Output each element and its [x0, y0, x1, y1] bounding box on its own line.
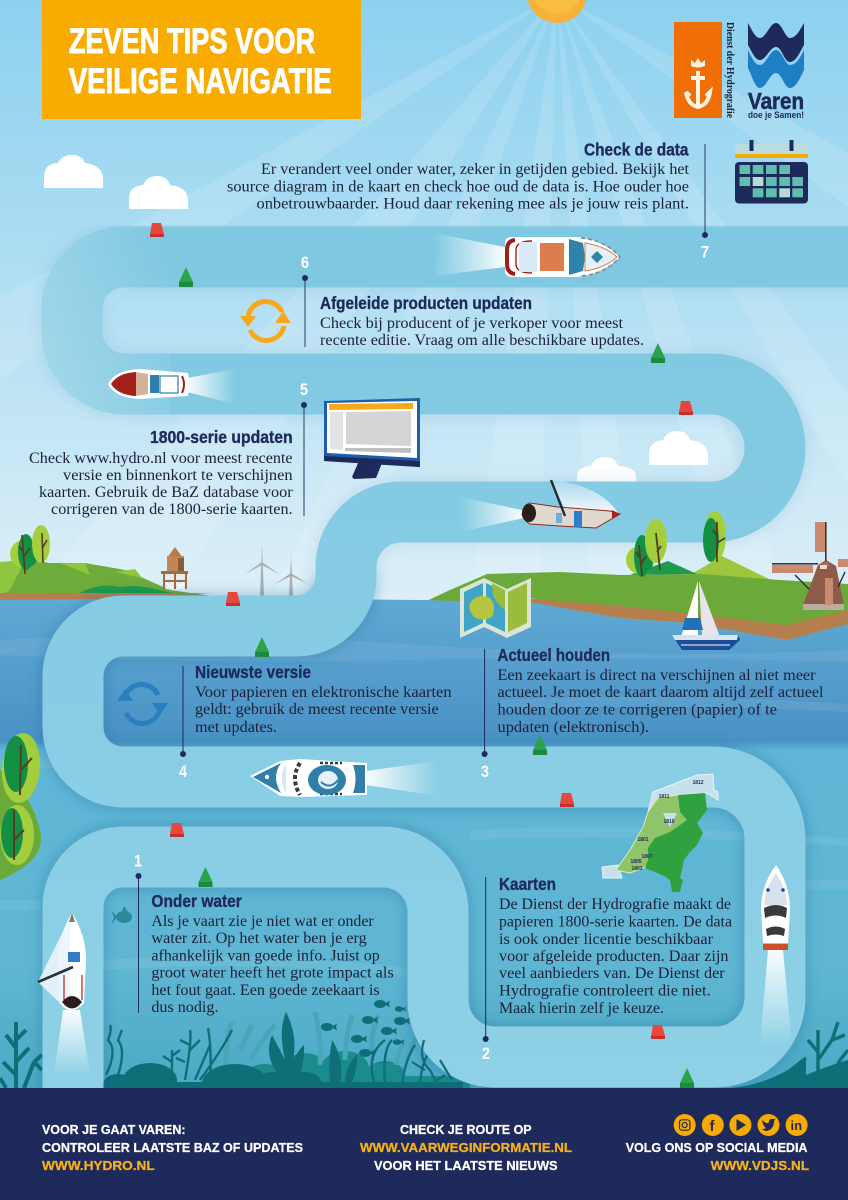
- tip 3: actueel houden: houden door ze te corrigeren (papier) of te: [498, 702, 777, 718]
- footer: centre text: CHECK JE ROUTE OP: [400, 1123, 532, 1137]
- tip 3: actueel houden: [481, 645, 824, 781]
- tip 2: kaarten: Maak hierin zelf je keuze.: [499, 1000, 664, 1017]
- seaweed over river: [412, 1040, 452, 1086]
- map icon: [460, 578, 531, 638]
- footer: centre text: VOOR HET LAATSTE NIEUWS: [374, 1159, 558, 1173]
- tip 1: onder water: afhankelijk van goede info. Juist op: [151, 948, 380, 964]
- map of the Netherlands: 1803: [631, 866, 643, 872]
- map of the Netherlands: 1811: [659, 794, 670, 800]
- tip 1: onder water: groot water heeft het grote impact als: [151, 964, 394, 982]
- tip 3: actueel houden: Een zeekaart is direct na verschijnen al niet meer: [498, 667, 816, 684]
- icon: fish: [111, 906, 132, 925]
- tip 4: nieuwste versie: Voor papieren en elektronische kaarten: [195, 684, 452, 701]
- tip 4: nieuwste versie: Nieuwste versie: [195, 662, 311, 682]
- map of the Netherlands: 1810: [663, 819, 675, 825]
- wind turbines: [245, 545, 308, 596]
- tip 1: onder water: Onder water: [151, 891, 242, 911]
- boat: red speedboat: [108, 369, 235, 404]
- tip 7: check de data: Er verandert veel onder water, zeker in getijden gebied. Bekijk het: [261, 161, 690, 178]
- icon: calendar: [735, 140, 808, 204]
- footer: left text: CONTROLEER LAATSTE BAZ OF UPDATES: [42, 1141, 303, 1155]
- title block: ZEVEN TIPS VOOR: [69, 22, 315, 61]
- tip 4: nieuwste versie: [179, 662, 452, 781]
- tip 1: onder water: water zit. Op het water ben je erg: [151, 930, 367, 947]
- tip 7: check de data: Check de data: [584, 140, 689, 160]
- logo: Dienst der Hydrografie: [674, 22, 735, 119]
- tip 3: actueel houden: 3: [481, 762, 489, 781]
- tip 4: nieuwste versie: met updates.: [195, 719, 277, 736]
- icon: orange sync arrows: [240, 302, 291, 340]
- tip 1: onder water: [134, 852, 394, 1016]
- tip 7: check de data: [227, 140, 709, 262]
- map of the Netherlands: [602, 774, 718, 892]
- map of the Netherlands: 1807: [641, 854, 653, 860]
- tip 5: 1800-serie updaten: corrigeren van de 1800-serie kaarten.: [51, 501, 293, 518]
- icon: blue sync arrows: [117, 685, 168, 723]
- footer: left text: [42, 1123, 303, 1173]
- boat: sailboat heading right: [460, 480, 620, 532]
- windmill: [772, 522, 848, 610]
- tip 2: kaarten: Kaarten: [499, 874, 556, 894]
- boat: sailboat heading north: [38, 913, 90, 1075]
- river shadow in the sky: [72, 257, 848, 576]
- logo: Varen doe je Samen: doe je Samen!: [748, 110, 804, 120]
- lighthouse tower: [161, 547, 188, 589]
- footer band: [0, 1088, 848, 1200]
- footer: social media: WWW.VDJS.NL: [711, 1159, 809, 1173]
- tip 5: 1800-serie updaten: versie en binnenkort te verschijnen: [63, 467, 293, 484]
- tip 7: check de data: source diagram in de kaart en check hoe oud de data is. Hoe ouder hoe: [227, 178, 689, 196]
- clouds: [44, 155, 708, 482]
- tip 5: 1800-serie updaten: 1800-serie updaten: [150, 427, 293, 447]
- tip 6: afgeleide producten: recente editie. Vraag om alle beschikbare updates.: [320, 332, 644, 349]
- tip 1: onder water: Als je vaart zie je niet wat er onder: [151, 913, 374, 930]
- tip 5: 1800-serie updaten: [29, 380, 308, 518]
- tip 7: check de data: onbetrouwbaarder. Houd daar rekening mee als je jouw reis plant.: [256, 196, 689, 213]
- boat: white motorboat heading north: [760, 865, 792, 1045]
- tree group left: [10, 525, 50, 574]
- tip 2: kaarten: [482, 874, 732, 1063]
- map of the Netherlands: 1805: [630, 859, 642, 865]
- tip 1: onder water: dus nodig.: [151, 999, 218, 1016]
- land right with hills: [420, 556, 848, 640]
- river shadow in the sea: [73, 576, 775, 1100]
- boat: motor yacht top: [433, 233, 620, 277]
- tip 6: afgeleide producten: [301, 253, 644, 349]
- tip 3: actueel houden: Actueel houden: [498, 645, 610, 665]
- tip 6: afgeleide producten: 6: [301, 253, 309, 272]
- buoys: [150, 223, 694, 1088]
- logo: Dienst der Hydrografie: Dienst der Hydrografie: [724, 22, 735, 119]
- sailboat on the water: [672, 581, 740, 650]
- tip 4: nieuwste versie: 4: [179, 762, 187, 781]
- footer: centre text: [360, 1123, 572, 1173]
- tip 2: kaarten: De Dienst der Hydrografie maakt de: [499, 896, 731, 913]
- logo: Varen doe je Samen: [748, 23, 804, 120]
- tip 2: kaarten: voor afgeleide producten. Daar zijn: [499, 948, 728, 965]
- sea: [0, 598, 848, 1090]
- tip 4: nieuwste versie: geldt: gebruik de meest recente versie: [195, 701, 439, 718]
- boat: white yacht: [250, 759, 438, 797]
- footer: social media: VOLG ONS OP SOCIAL MEDIA: [626, 1141, 808, 1155]
- footer: social media: in: [790, 1118, 802, 1133]
- winding route river: [72, 257, 848, 1100]
- tip 5: 1800-serie updaten: Check www.hydro.nl voor meest recente: [29, 450, 293, 467]
- icon: computer monitor: [324, 398, 420, 479]
- background: sky: [0, 0, 848, 600]
- sun: [527, 0, 587, 23]
- logo: Varen doe je Samen: Varen: [748, 88, 804, 114]
- map of the Netherlands: 1812: [692, 780, 704, 786]
- title block: VEILIGE NAVIGATIE: [69, 62, 332, 101]
- reef, corals and seaweed: [0, 1000, 848, 1104]
- tip 2: kaarten: papieren 1800-serie kaarten. De data: [499, 914, 732, 931]
- trees right: [626, 511, 726, 577]
- tip 6: afgeleide producten: Afgeleide producten updaten: [320, 293, 532, 313]
- tip 5: 1800-serie updaten: 5: [300, 380, 308, 399]
- land left with hills: [0, 560, 212, 603]
- map of the Netherlands: 1801: [637, 837, 649, 843]
- tip 1: onder water: 1: [134, 852, 142, 871]
- footer: centre text: WWW.VAARWEGINFORMATIE.NL: [360, 1141, 572, 1155]
- tip 7: check de data: 7: [701, 242, 709, 262]
- sun rays: [0, 0, 848, 600]
- footer: left text: VOOR JE GAAT VAREN:: [42, 1123, 186, 1137]
- tip 3: actueel houden: actueel. Je moet de kaart daarom altijd zelf actueel: [498, 684, 824, 701]
- left island with trees: [0, 731, 43, 880]
- tip 6: afgeleide producten: Check bij producent of je verkoper voor meest: [320, 315, 624, 332]
- tip 2: kaarten: Hydrografie controleert die niet.: [499, 982, 711, 1000]
- tip 2: kaarten: 2: [482, 1044, 490, 1063]
- tip 5: 1800-serie updaten: kaarten. Gebruik de BaZ database voor: [39, 484, 293, 501]
- footer: social media: f: [710, 1118, 716, 1135]
- tip 1: onder water: het fout gaat. Een goede zeekaart is: [151, 982, 380, 999]
- footer: left text: WWW.HYDRO.NL: [42, 1159, 155, 1173]
- tip 2: kaarten: is ook onder licentie beschikbaar: [499, 931, 714, 948]
- tip 3: actueel houden: updaten (elektronisch).: [498, 719, 649, 736]
- tip 2: kaarten: veel aanbieders van. De Dienst der: [499, 965, 725, 982]
- title block: [42, 0, 361, 119]
- footer: social media: [626, 1114, 809, 1173]
- sea ripples: [0, 636, 848, 976]
